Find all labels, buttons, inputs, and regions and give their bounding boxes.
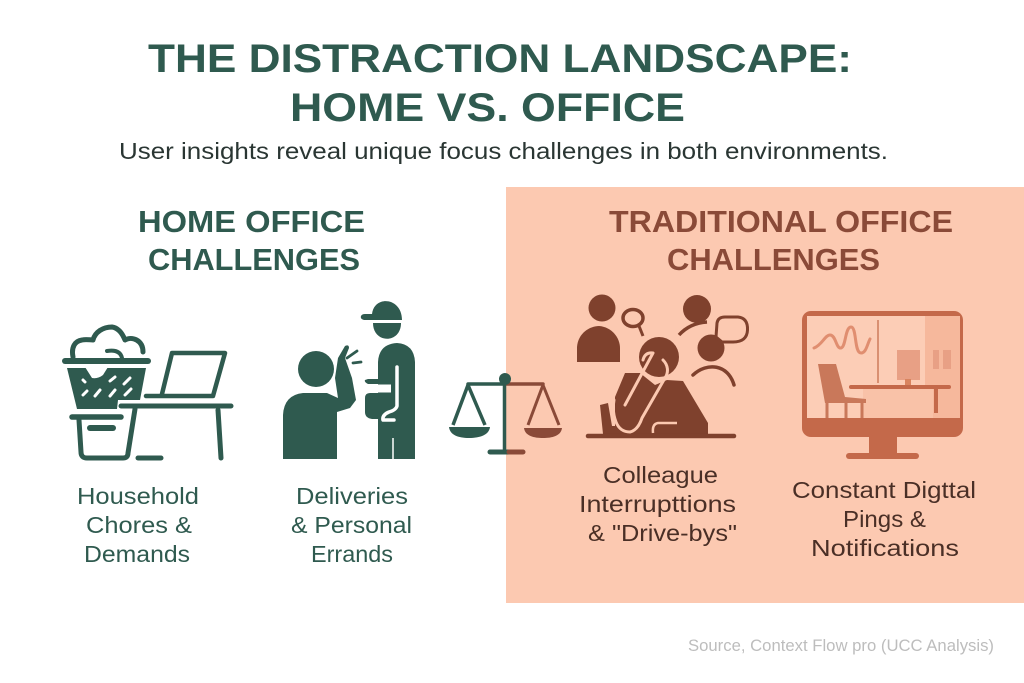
heading: home office challenges: CHALLENGES xyxy=(148,242,360,277)
icon: monitor with office scene xyxy=(802,311,963,456)
label: deliveries and errands: & Personal xyxy=(291,512,412,538)
label: deliveries and errands xyxy=(291,483,412,567)
panel: traditional office background xyxy=(506,187,1024,603)
heading: traditional office challenges: CHALLENGES xyxy=(667,242,880,277)
title: THE DISTRACTION LANDSCAPE: xyxy=(148,37,852,81)
label: digital pings xyxy=(792,477,976,561)
label: deliveries and errands: Errands xyxy=(311,541,393,567)
heading: home office challenges: HOME OFFICE xyxy=(138,204,365,239)
label: colleague interruptions: Colleague xyxy=(603,462,718,488)
label: household chores: Demands xyxy=(84,541,190,567)
label: household chores xyxy=(77,483,199,567)
icon: stressed person surrounded by colleagues xyxy=(577,294,748,436)
icon: person interrupted by delivery worker xyxy=(283,301,415,459)
label: colleague interruptions: Interrupttions xyxy=(579,491,736,517)
source note: Source, Context Flow pro (UCC Analysis) xyxy=(688,636,994,655)
label: colleague interruptions: & "Drive-bys" xyxy=(588,520,737,546)
title xyxy=(148,37,852,130)
subtitle: User insights reveal unique focus challenges in both environments. xyxy=(119,138,888,164)
icon: balance scale xyxy=(449,373,562,452)
title: HOME VS. OFFICE xyxy=(290,86,685,130)
heading: traditional office challenges xyxy=(609,204,953,277)
label: colleague interruptions xyxy=(579,462,737,546)
label: digital pings: Pings & xyxy=(843,506,926,532)
label: household chores: Chores & xyxy=(86,512,192,538)
heading: home office challenges xyxy=(138,204,365,277)
icon: laundry basket and laptop desk xyxy=(65,327,231,458)
label: deliveries and errands: Deliveries xyxy=(296,483,408,509)
label: digital pings: Constant Digttal xyxy=(792,477,976,503)
label: digital pings: Notifications xyxy=(811,535,959,561)
label: household chores: Household xyxy=(77,483,199,509)
heading: traditional office challenges: TRADITIONAL OFFICE xyxy=(609,204,953,239)
